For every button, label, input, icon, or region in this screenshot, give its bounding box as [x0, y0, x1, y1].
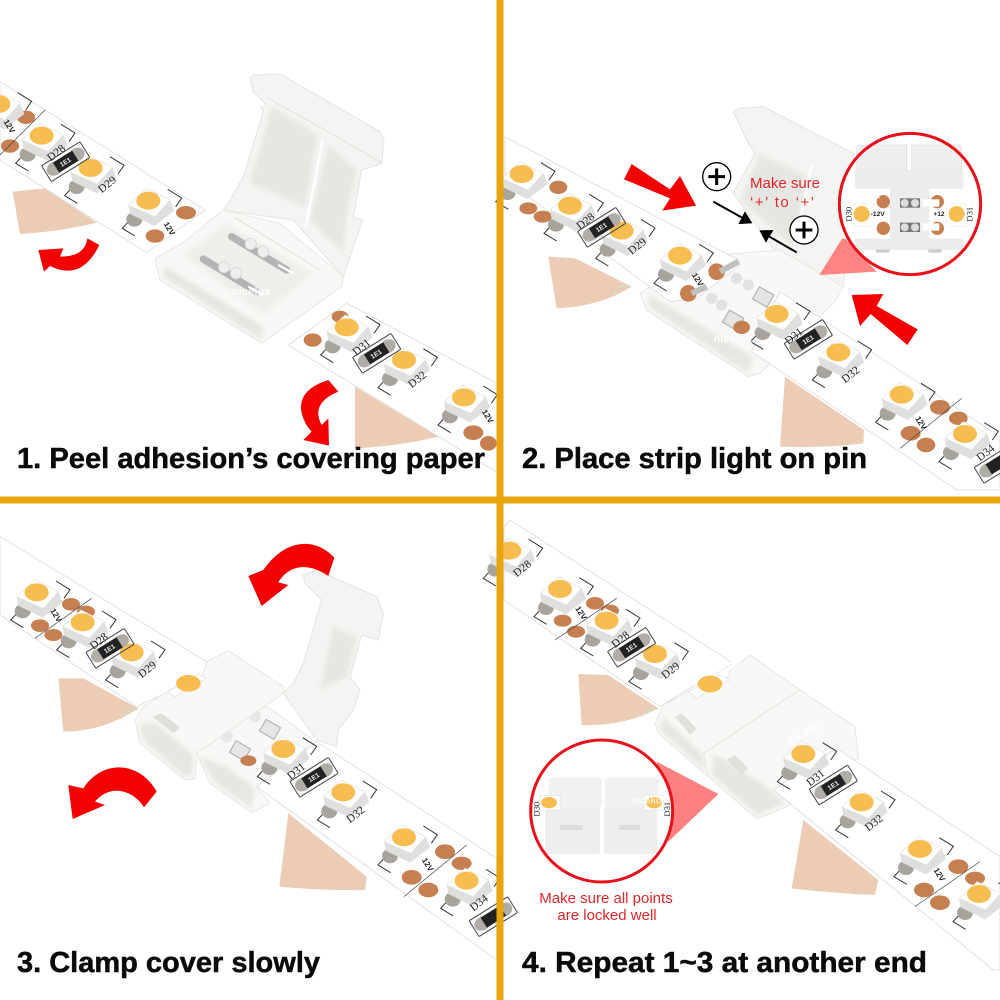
heading 1: 1. Peel adhesion’s covering paper	[17, 443, 485, 475]
note polarity line 2: ‘+’ to ‘+’	[750, 194, 814, 211]
right LED strip: D31	[804, 768, 827, 789]
backing paper left	[58, 678, 138, 732]
backing paper right	[792, 820, 878, 895]
heading 2: 2. Place strip light on pin	[522, 443, 867, 475]
inset close-up: nicelux	[632, 795, 665, 805]
note locked line 1: Make sure all points	[539, 890, 673, 907]
connector with lid	[640, 107, 853, 377]
divider vertical	[496, 0, 504, 1000]
magnifier wedge	[819, 237, 877, 275]
right LED strip: 1E1	[307, 772, 321, 784]
left LED strip: 1E1	[103, 643, 117, 655]
left LED strip: D28	[45, 142, 68, 164]
left LED strip: 1E1	[625, 642, 639, 654]
plus sign right	[790, 216, 818, 244]
left LED strip: D28	[88, 631, 111, 652]
connector closed	[655, 655, 858, 819]
inset close-up	[531, 740, 673, 882]
curved arrow top	[248, 544, 334, 606]
curved arrow left	[38, 238, 99, 272]
left LED strip: 12V	[162, 220, 177, 238]
pins	[229, 719, 281, 766]
left LED strip: 12V	[2, 118, 17, 135]
panel 2 artwork: nicelux	[707, 235, 746, 247]
panel 2 artwork	[496, 107, 1000, 490]
black arrow left	[713, 202, 751, 223]
left LED strip: D29	[659, 660, 682, 682]
panel 2 artwork: nicelux	[713, 333, 753, 345]
left LED strip: 12V	[48, 607, 64, 624]
panel 2: place strip	[496, 107, 1000, 490]
note locked line 2: are locked well	[557, 907, 657, 924]
right LED strip: 12V	[932, 866, 947, 884]
left LED strip: D29	[96, 174, 119, 196]
connector open: nicelux	[232, 286, 271, 298]
right LED strip: 12V	[913, 415, 929, 432]
inset close-up: D31	[965, 207, 975, 222]
magnifier wedge	[657, 762, 718, 842]
panel 1: peel adhesion	[0, 74, 500, 475]
block arrow bottom right	[852, 294, 918, 345]
inset close-up: D31	[662, 802, 672, 817]
inset close-up: D30	[844, 207, 854, 222]
right LED strip: D34	[468, 892, 491, 914]
LED in cover window	[688, 675, 730, 698]
inset close-up: +12	[933, 211, 945, 218]
left LED strip: 1E1	[59, 156, 73, 169]
right LED strip: D31	[350, 337, 373, 358]
right LED strip: 1E1	[370, 348, 384, 361]
right LED strip: 1E1	[827, 780, 841, 792]
pins	[692, 262, 774, 334]
right LED strip	[257, 737, 517, 960]
right LED strip: 12V	[480, 408, 495, 425]
connector open	[155, 74, 384, 343]
left LED strip: 12V	[690, 271, 705, 289]
right LED strip: D32	[863, 812, 886, 834]
right LED strip	[288, 303, 500, 473]
block arrow top left	[624, 164, 696, 211]
left LED strip	[483, 520, 733, 707]
backing paper left	[548, 257, 632, 308]
lid and base	[197, 570, 383, 813]
right LED strip: 12V	[420, 856, 435, 874]
backing paper right	[355, 387, 438, 448]
panel 3 artwork	[0, 537, 517, 960]
curved arrow right	[301, 380, 338, 446]
panel 3: clamp cover	[0, 537, 517, 979]
divider horizontal	[0, 496, 1000, 504]
backing paper right	[279, 813, 367, 890]
left LED strip: D28	[574, 211, 597, 232]
LED in cover window	[168, 674, 206, 697]
left LED strip: 1E1	[595, 222, 609, 234]
left LED strip: D29	[626, 236, 649, 257]
inset close-up: nicelux	[848, 190, 881, 200]
panel 4 artwork	[483, 520, 1000, 970]
base	[155, 210, 343, 343]
backing paper right	[780, 377, 864, 447]
note polarity: Make sure	[750, 175, 820, 192]
backing paper left	[578, 674, 658, 725]
curved arrow bottom	[68, 767, 157, 819]
heading 3: 3. Clamp cover slowly	[17, 947, 320, 979]
right LED strip: D32	[406, 369, 429, 391]
left LED strip: D28	[511, 558, 534, 580]
heading 4: 4. Repeat 1~3 at another end	[522, 947, 927, 979]
right LED strip	[773, 742, 1000, 970]
backing paper left	[13, 188, 97, 234]
left LED strip	[0, 537, 207, 707]
cover	[135, 651, 283, 780]
pins	[203, 237, 293, 295]
left LED strip	[496, 137, 740, 302]
inset close-up: D30	[531, 802, 541, 817]
right LED strip: D31	[285, 761, 308, 782]
panel 4: repeat	[483, 520, 1000, 979]
left LED strip: D29	[136, 659, 159, 681]
right LED strip: D34	[974, 442, 997, 464]
black arrow right	[761, 231, 797, 252]
inset close-up	[839, 133, 981, 275]
right LED strip	[751, 292, 1000, 490]
right LED strip: D32	[839, 364, 862, 386]
left LED strip: D28	[609, 629, 632, 651]
panel 1 artwork	[0, 74, 500, 473]
plus sign left	[703, 163, 731, 191]
connector closed: nicelux	[704, 655, 744, 686]
right LED strip: D32	[344, 804, 367, 826]
right LED strip: D31	[783, 326, 806, 347]
lid	[223, 74, 384, 277]
left LED strip	[0, 82, 205, 253]
connector closed: nicelux	[787, 716, 827, 748]
right LED strip: 1E1	[802, 334, 816, 346]
inset close-up: -12V	[871, 211, 885, 218]
left LED strip: 12V	[573, 605, 589, 622]
